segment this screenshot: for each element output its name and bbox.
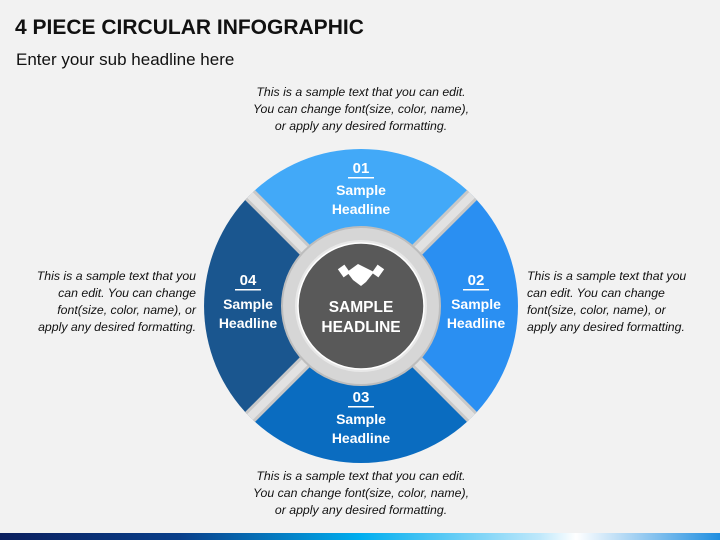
segment 01: 01 (353, 160, 369, 177)
text block: bottom: You can change font(size, color, name), (253, 486, 469, 500)
segment 01: Sample (336, 182, 386, 198)
segment 01 (250, 149, 472, 306)
text block: bottom (253, 469, 469, 517)
text block: right: This is a sample text that you (527, 269, 686, 283)
segment 01: Headline (332, 201, 390, 217)
text block: bottom: This is a sample text that you can edit. (256, 469, 466, 483)
segment 03: Headline (332, 430, 390, 446)
segment 03 (250, 306, 472, 463)
title: 4 PIECE CIRCULAR INFOGRAPHIC (15, 16, 364, 39)
text block: top: You can change font(size, color, name), (253, 102, 469, 116)
center ring: HEADLINE (321, 319, 401, 336)
text block: bottom: or apply any desired formatting. (275, 503, 447, 517)
text block: left (37, 269, 196, 334)
segment 02 (361, 195, 518, 417)
segment 04 (204, 195, 361, 417)
text block: left: This is a sample text that you (37, 269, 196, 283)
segment 03: 03 (353, 389, 369, 406)
segment 04: Sample (223, 296, 273, 312)
segment 02: Headline (447, 315, 505, 331)
segment 04: 04 (240, 272, 257, 289)
text block: right (527, 269, 686, 334)
center ring (282, 227, 440, 385)
segment 03: Sample (336, 411, 386, 427)
text block: left: can edit. You can change (58, 286, 196, 300)
center ring: SAMPLE (329, 299, 393, 316)
segment 02: 02 (468, 272, 484, 289)
icon: handshake (338, 264, 384, 286)
bottom gradient bar (0, 533, 720, 540)
text block: left: font(size, color, name), or (57, 303, 196, 317)
text block: right: apply any desired formatting. (527, 320, 685, 334)
segment 04: Headline (219, 315, 277, 331)
text block: top: or apply any desired formatting. (275, 119, 447, 133)
text block: right: can edit. You can change (527, 286, 665, 300)
text block: right: font(size, color, name), or (527, 303, 666, 317)
subtitle: Enter your sub headline here (16, 50, 234, 69)
segment 02: Sample (451, 296, 501, 312)
text block: top: This is a sample text that you can edit. (256, 85, 466, 99)
text block: left: apply any desired formatting. (38, 320, 196, 334)
text block: top (253, 85, 469, 133)
